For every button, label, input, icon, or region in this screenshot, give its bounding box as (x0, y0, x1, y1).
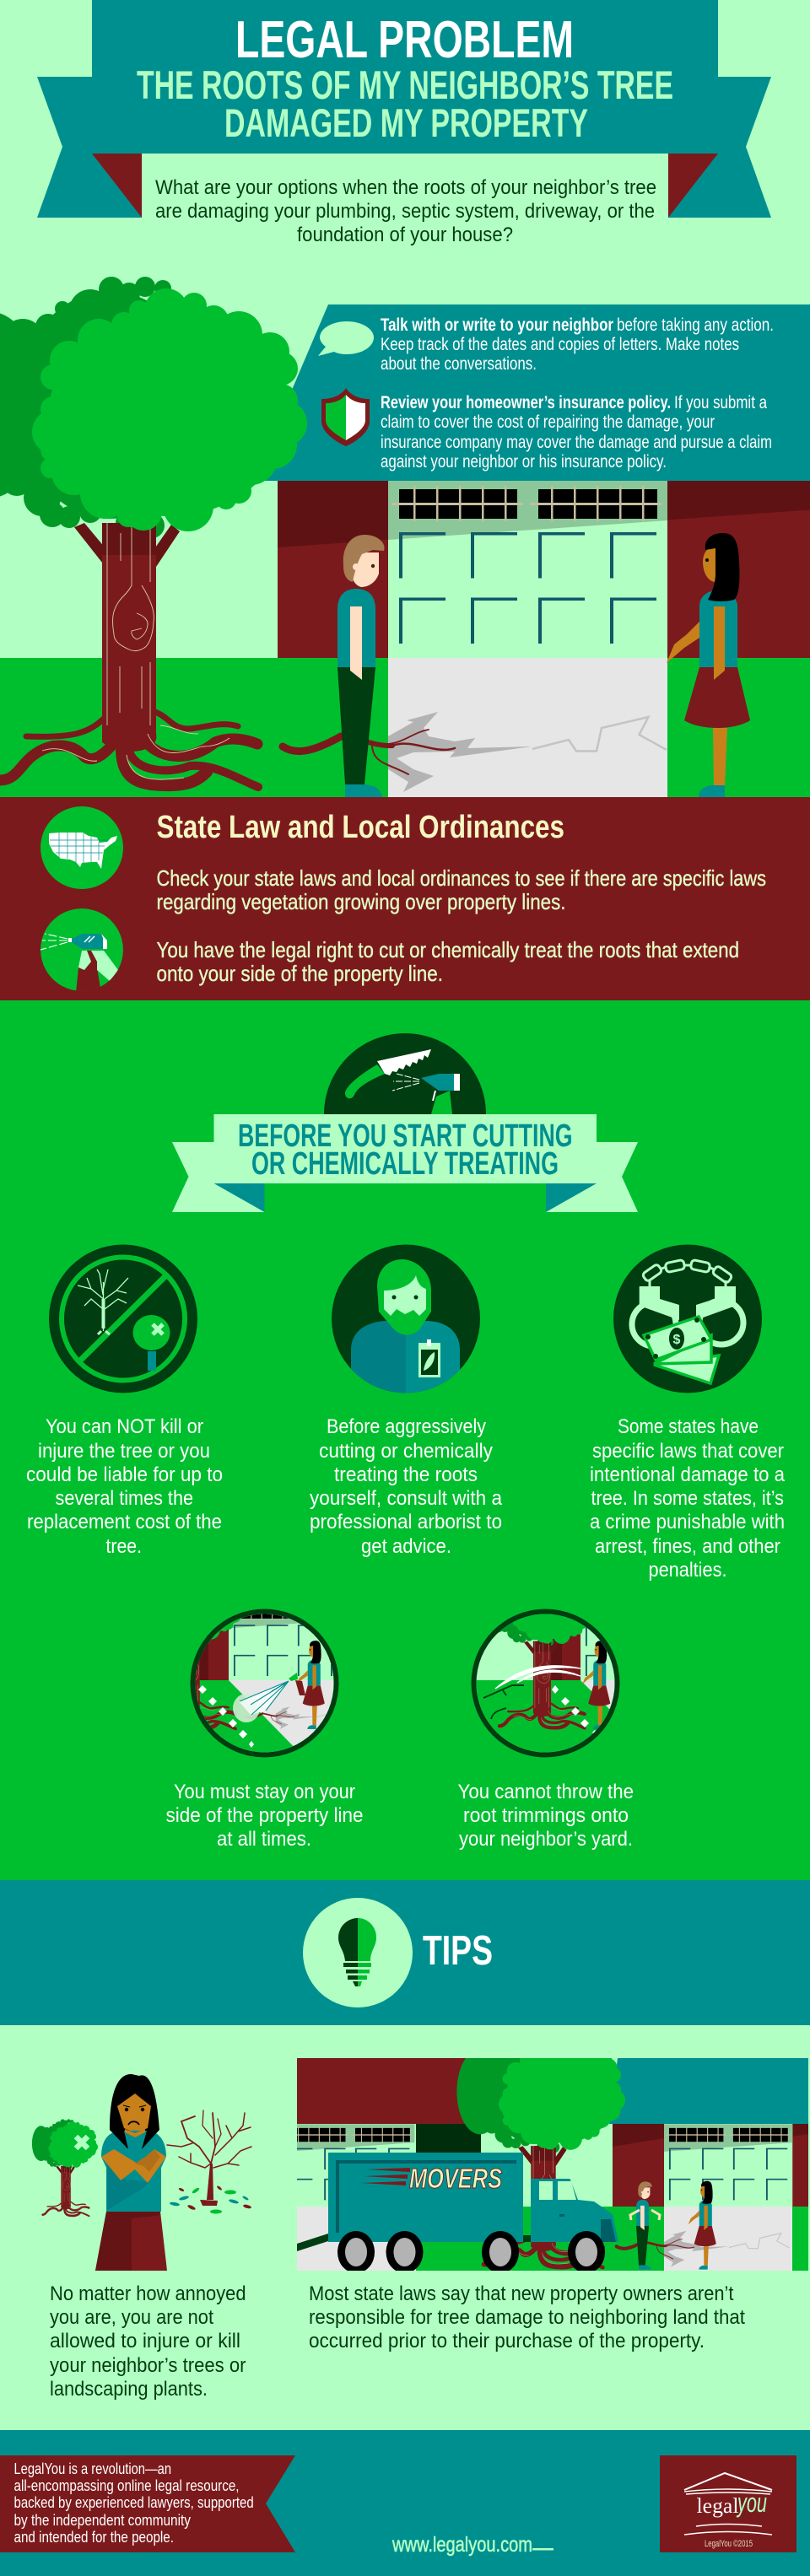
text: cannot kill: several times the (56, 1487, 193, 1510)
section ribbon (172, 1114, 638, 1212)
icon: no killing the tree (49, 1245, 197, 1393)
text: stay on your side: side of the property line (165, 1804, 363, 1827)
text: stay on your side (165, 1781, 363, 1851)
ribbon heading: BEFORE YOU START CUTTING (238, 1118, 572, 1154)
text: no matter how annoyed: your neighbor’s trees or (50, 2354, 246, 2377)
text: root trimmings (457, 1781, 634, 1851)
icon: handcuffs and money (613, 1245, 762, 1393)
logo: legal (697, 2495, 739, 2518)
logo: you (737, 2487, 767, 2518)
logo: LegalYou ©2015 (705, 2539, 753, 2549)
text: new property owners: responsible for tree damage to neighboring land that (309, 2306, 745, 2329)
text: no matter how annoyed (50, 2282, 246, 2401)
text: state laws: penalties. (648, 1559, 727, 1582)
text: review insurance policy (381, 393, 772, 472)
icon: US map (40, 806, 123, 889)
text: root trimmings: You cannot throw the (457, 1781, 634, 1803)
text: consult an arborist: Before aggressively (327, 1415, 486, 1438)
icon: spray bottle and hand (40, 908, 123, 993)
intro text (155, 176, 656, 246)
text: state laws: a crime punishable with (590, 1511, 785, 1533)
subtitle line 2: DAMAGED MY PROPERTY (224, 100, 588, 145)
text: no matter how annoyed: No matter how annoyed (50, 2282, 246, 2305)
text: state laws: tree. In some states, it’s (591, 1487, 784, 1510)
icon: light bulb (303, 1898, 413, 2007)
text: cannot kill: could be liable for up to (26, 1463, 223, 1486)
text: state laws: Some states have (618, 1415, 759, 1438)
text: cannot kill: tree. (106, 1535, 142, 1558)
about pennant: LegalYou is a revolution—an (14, 2460, 171, 2477)
panel: tips banner (0, 1880, 810, 2025)
icon: saw and spray bottle (324, 1033, 486, 1114)
dead tree (167, 2110, 251, 2213)
speed lines (361, 2168, 410, 2185)
text: stay on your side: You must stay on your (174, 1781, 355, 1803)
illustration: annoyed woman with trees (32, 2074, 251, 2271)
fallen leaves (170, 2185, 251, 2213)
intro text: What are your options when the roots of your neighbor’s tree (155, 176, 656, 199)
text: cannot kill (26, 1415, 223, 1558)
text: consult an arborist: cutting or chemically (319, 1440, 493, 1463)
text: state laws: specific laws that cover (592, 1440, 784, 1463)
heading: State Law and Local Ordinances (157, 810, 564, 845)
icon: speech bubble (318, 321, 374, 356)
small healthy tree (32, 2119, 98, 2216)
ribbon heading (238, 1118, 572, 1182)
text: new property owners: Most state laws say that new property owners aren’t (309, 2282, 734, 2305)
icon: throwing root trimmings (471, 1609, 619, 1758)
text: root trimmings: root trimmings onto (463, 1804, 629, 1827)
text: state laws: intentional damage to a (590, 1463, 786, 1486)
text: state laws: arrest, fines, and other (595, 1535, 780, 1558)
ribbon heading: OR CHEMICALLY TREATING (251, 1146, 559, 1182)
about pennant: and intended for the people. (14, 2529, 174, 2546)
text: talk with your neighbor: Talk with or write to your neighbor (381, 315, 613, 335)
text: no matter how annoyed: allowed to injure or kill (50, 2330, 240, 2352)
text: cannot kill: replacement cost of the (27, 1511, 222, 1533)
panel: before you start cutting (0, 1000, 810, 1880)
truck lettering: MOVERS (409, 2163, 502, 2194)
about pennant: backed by experienced lawyers, supported (14, 2494, 254, 2511)
heading: tips: TIPS (423, 1928, 493, 1974)
text: stay on your side: at all times. (217, 1828, 311, 1851)
text: no matter how annoyed: landscaping plants. (50, 2378, 208, 2401)
about pennant (0, 2455, 295, 2552)
panel: state law and local ordinances (0, 797, 810, 1000)
text: consult an arborist: professional arborist to (310, 1511, 502, 1533)
about pennant: by the independent community (14, 2512, 191, 2529)
icon: arborist (332, 1245, 480, 1393)
intro text: foundation of your house? (297, 224, 513, 246)
text: no matter how annoyed: you are, you are not (50, 2306, 213, 2329)
text: consult an arborist: yourself, consult with a (310, 1487, 503, 1510)
house and driveway illustration (0, 481, 810, 797)
illustration: woman (667, 533, 750, 797)
illustration: man (338, 535, 385, 797)
illustration: movers truck scene (297, 2058, 808, 2271)
text: legal right: onto your side of the property line. (157, 961, 443, 986)
annoyed woman (95, 2074, 167, 2271)
text: root trimmings: your neighbor’s yard. (459, 1828, 633, 1851)
text: check your laws: regarding vegetation growing over property lines. (157, 889, 565, 914)
text: talk with your neighbor: about the conversations. (381, 354, 537, 374)
text: consult an arborist (310, 1415, 503, 1558)
text: new property owners (309, 2282, 745, 2352)
illustration: neighbor's tree with roots (0, 277, 307, 787)
intro text: are damaging your plumbing, septic system, driveway, or the (155, 200, 655, 223)
text: review insurance policy: Review your homeowner’s insurance policy. (381, 393, 671, 412)
logo (660, 2455, 796, 2552)
text: check your laws (157, 865, 766, 914)
text: state laws (590, 1415, 786, 1582)
text: consult an arborist: treating the roots (334, 1463, 478, 1486)
text: talk with your neighbor: before taking any action. (617, 315, 774, 335)
text: review insurance policy: against your neighbor or his insurance policy. (381, 452, 667, 472)
panel: talk and insurance advice (253, 304, 810, 481)
title ribbon (37, 0, 771, 218)
text: cannot kill: injure the tree or you (38, 1440, 210, 1463)
title: LEGAL PROBLEM (235, 11, 574, 69)
text: new property owners: occurred prior to their purchase of the property. (309, 2330, 705, 2352)
text: cannot kill: You can NOT kill or (46, 1415, 203, 1438)
panel: footer (0, 2430, 810, 2576)
text: consult an arborist: get advice. (361, 1535, 451, 1558)
icon: handcuffs and money: $ (673, 1333, 680, 1347)
truck wheels (338, 2231, 605, 2273)
text: talk with your neighbor (381, 315, 774, 374)
about pennant: all-encompassing online legal resource, (14, 2477, 240, 2494)
text: legal right (157, 937, 739, 986)
icon: shield (321, 388, 370, 446)
text: review insurance policy: claim to cover the cost of repairing the damage, your (381, 412, 715, 432)
text: review insurance policy: If you submit a (674, 393, 767, 412)
truck (297, 2153, 618, 2273)
icon: stay on your side (191, 1609, 339, 1758)
website url: www.legalyou.com (392, 2533, 532, 2557)
